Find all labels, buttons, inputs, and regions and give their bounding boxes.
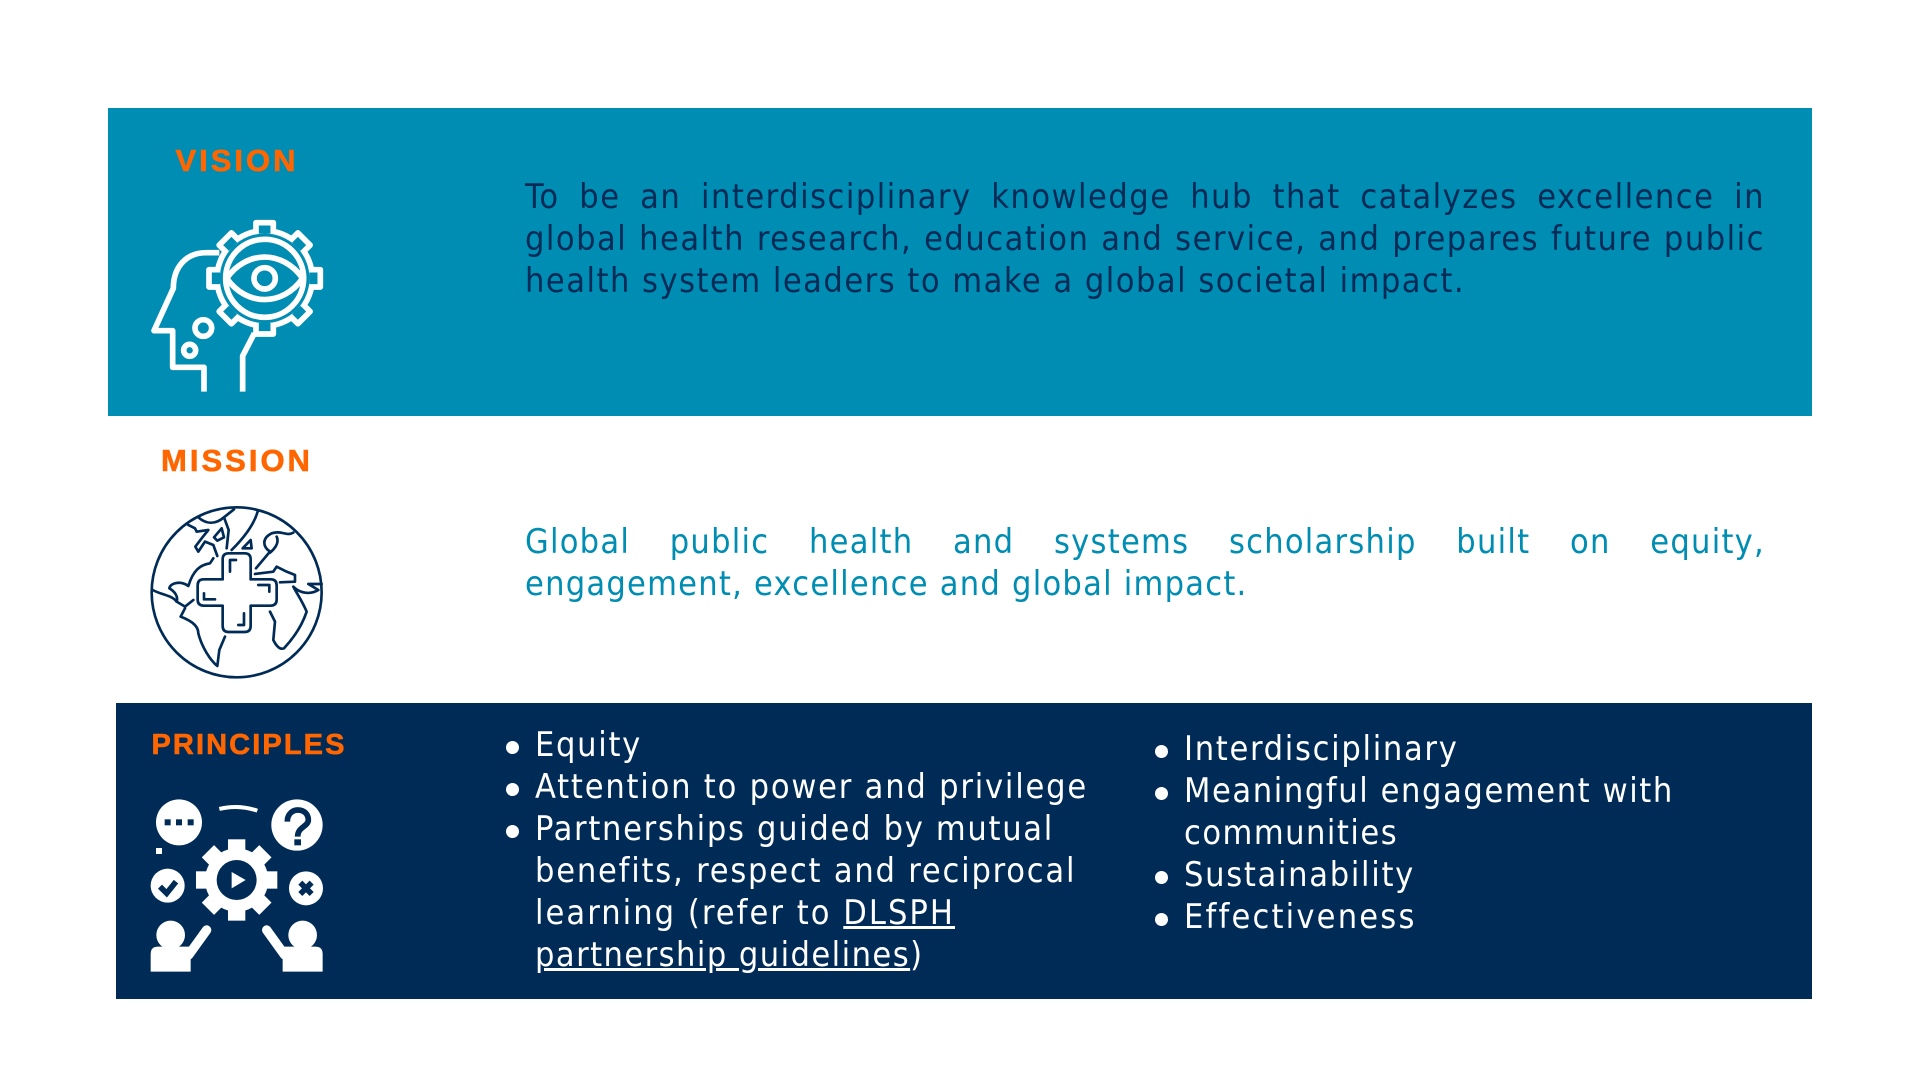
list: principles column one: benefits, respect and reciprocal: [535, 851, 1076, 891]
list: principles column two: Effectiveness: [1184, 897, 1417, 937]
list: principles column two: [1155, 729, 1674, 937]
list: principles column two: communities: [1184, 813, 1398, 853]
panel: vision: [108, 108, 1812, 416]
list: principles column one: Partnerships guided by mutual: [535, 809, 1054, 849]
text: vision statement: global health research, education and service, and prepares future public: [525, 219, 1765, 259]
text: mission statement: Global public health and systems scholarship built on equity,: [525, 522, 1765, 562]
text: vision statement: To be an interdisciplinary knowledge hub that catalyzes excellence in: [525, 177, 1765, 217]
heading: vision: VISION: [175, 143, 299, 178]
list: principles column one: Equity: [535, 725, 642, 765]
heading: mission: MISSION: [161, 443, 313, 478]
list: principles column two: Interdisciplinary: [1184, 729, 1458, 769]
text: vision statement: health system leaders to make a global societal impact.: [525, 261, 1465, 301]
list: principles column one: partnership guidelines): [535, 935, 923, 975]
text: vision statement: [524, 177, 1765, 301]
list: principles column one: [506, 725, 1088, 975]
text: mission statement: engagement, excellence and global impact.: [525, 564, 1248, 604]
panel: principles: [116, 703, 1812, 999]
list: principles column two: Meaningful engagement with: [1184, 771, 1674, 811]
list: principles column two: Sustainability: [1184, 855, 1415, 895]
list: principles column one: Attention to power and privilege: [535, 767, 1088, 807]
text: mission statement: [525, 522, 1765, 604]
heading: principles: PRINCIPLES: [151, 729, 347, 761]
list: principles column one: learning (refer to DLSPH: [535, 893, 955, 933]
